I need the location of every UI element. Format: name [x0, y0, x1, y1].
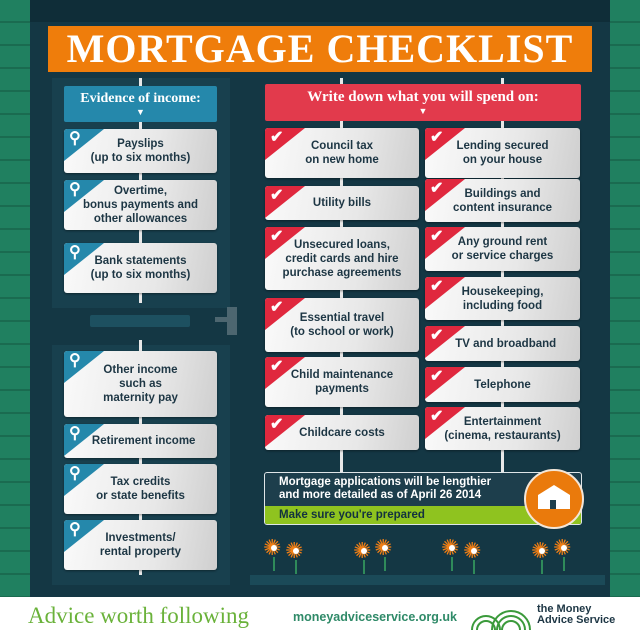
card: council tax: Council tax	[311, 140, 373, 152]
card: travel: Essential travel	[300, 312, 384, 324]
card: other income	[64, 351, 217, 417]
banner: Make sure you're prepared	[279, 509, 425, 521]
card: unsecured loans	[265, 227, 419, 290]
card: lending: Lending secured	[456, 140, 549, 152]
card: council tax: ✔	[270, 129, 283, 146]
card: unsecured loans: ✔	[270, 228, 283, 245]
card: overtime: bonus payments and	[83, 199, 198, 211]
card: investments: ⚲	[69, 521, 81, 538]
card: telephone	[425, 367, 580, 402]
flower sill	[250, 575, 605, 585]
card: buildings	[425, 179, 580, 222]
card: tax credits: or state benefits	[96, 490, 185, 502]
banner	[264, 472, 582, 525]
card: bank statements: Bank statements	[94, 255, 187, 267]
logo: the Money	[537, 603, 591, 615]
card: council tax: on new home	[305, 154, 379, 166]
door lower panel	[52, 345, 230, 585]
card: tax credits: Tax credits	[111, 476, 170, 488]
card: housekeeping: including food	[463, 300, 542, 312]
card: telephone: ✔	[430, 368, 443, 385]
spending column 1	[264, 128, 420, 452]
card: entertainment	[425, 407, 580, 450]
card: payslips: Payslips	[117, 138, 164, 150]
card: bank statements	[64, 243, 217, 293]
card: entertainment: ✔	[430, 408, 443, 425]
card: buildings: content insurance	[453, 202, 552, 214]
card: investments: Investments/	[105, 532, 176, 544]
card: tv: TV and broadband	[455, 338, 556, 350]
card: child maintenance	[265, 357, 419, 407]
card: payslips: (up to six months)	[91, 152, 190, 164]
card: bank statements: ⚲	[69, 244, 81, 261]
card: utility: Utility bills	[313, 197, 371, 209]
banner: and more detailed as of April 26 2014	[279, 489, 481, 501]
banner: Mortgage applications will be lengthier	[279, 476, 491, 488]
logo: Advice Service	[537, 614, 615, 626]
heading: evidence of income: Evidence of income:	[80, 91, 201, 106]
card: unsecured loans: Unsecured loans,	[294, 238, 390, 250]
card: other income: Other income	[103, 364, 178, 376]
card: childcare: Childcare costs	[299, 426, 385, 438]
title: MORTGAGE CHECKLIST	[67, 26, 573, 71]
card: lending: ✔	[430, 129, 443, 146]
card: child maintenance: ✔	[270, 358, 283, 375]
flowers: ✺	[531, 538, 549, 563]
card: lending	[425, 128, 580, 178]
flowers: ✺	[285, 538, 303, 563]
card: child maintenance: Child maintenance	[291, 369, 393, 381]
flowers: ✺	[263, 535, 281, 560]
door slot	[90, 315, 190, 327]
flowers: ✺	[353, 538, 371, 563]
card: other income: such as	[119, 378, 162, 390]
flowers: ✺	[441, 535, 459, 560]
card: investments	[64, 520, 217, 570]
heading: evidence of income: ▼	[136, 107, 145, 117]
card: tv	[425, 326, 580, 361]
card: retirement	[64, 424, 217, 458]
card: tax credits: ⚲	[69, 465, 81, 482]
card: travel: ✔	[270, 299, 283, 316]
flowers: ✺	[374, 535, 392, 560]
card: unsecured loans: credit cards and hire	[285, 252, 399, 264]
card: council tax	[265, 128, 419, 178]
card: ground rent: ✔	[430, 228, 443, 245]
card: overtime: other allowances	[94, 213, 187, 225]
card: ground rent	[425, 227, 580, 271]
card: payslips: ⚲	[69, 130, 81, 147]
card: lending: on your house	[463, 154, 542, 166]
card: bank statements: (up to six months)	[91, 269, 190, 281]
icon: house circle	[524, 469, 584, 529]
flowers	[263, 535, 571, 574]
card: buildings: Buildings and	[464, 188, 541, 200]
card: travel: (to school or work)	[290, 326, 394, 338]
card: payslips	[64, 129, 217, 173]
connector lines	[139, 78, 142, 303]
left panel backdrop	[52, 78, 230, 308]
card: other income: ⚲	[69, 352, 81, 369]
card: housekeeping: ✔	[430, 278, 443, 295]
income list	[64, 128, 218, 572]
card: entertainment: (cinema, restaurants)	[444, 430, 561, 442]
card: overtime	[64, 180, 217, 230]
heading: evidence of income	[64, 86, 217, 122]
card: tv: ✔	[430, 327, 443, 344]
card: telephone: Telephone	[474, 378, 531, 390]
icon: door handle	[215, 307, 237, 335]
heading: spend: Write down what you will spend on:	[307, 89, 539, 105]
heading: spend	[265, 84, 581, 121]
card: travel	[265, 298, 419, 352]
card: utility: ✔	[270, 187, 283, 204]
heading: spend: ▼	[419, 106, 427, 116]
card: retirement: Retirement income	[92, 435, 195, 447]
flowers: ✺	[553, 535, 571, 560]
logo	[471, 603, 615, 630]
card: entertainment: Entertainment	[464, 416, 541, 428]
card: tax credits	[64, 464, 217, 514]
flowers: ✺	[463, 538, 481, 563]
card: housekeeping	[425, 277, 580, 320]
card: overtime: ⚲	[69, 181, 81, 198]
card: childcare: ✔	[270, 416, 283, 433]
card: unsecured loans: purchase agreements	[283, 266, 401, 278]
card: ground rent: Any ground rent	[458, 236, 547, 248]
card: investments: rental property	[100, 546, 181, 558]
footer	[0, 597, 640, 640]
card: overtime: Overtime,	[114, 185, 167, 197]
card: housekeeping: Housekeeping,	[462, 286, 543, 298]
spending column 2	[424, 128, 580, 452]
card: utility	[265, 186, 419, 220]
card: childcare	[265, 415, 419, 450]
card: other income: maternity pay	[103, 392, 178, 404]
card: retirement: ⚲	[69, 425, 81, 442]
card: buildings: ✔	[430, 180, 443, 197]
tagline: Advice worth following	[28, 603, 249, 628]
url: moneyadviceservice.org.uk	[293, 610, 457, 624]
card: child maintenance: payments	[315, 383, 369, 395]
card: ground rent: or service charges	[452, 250, 553, 262]
